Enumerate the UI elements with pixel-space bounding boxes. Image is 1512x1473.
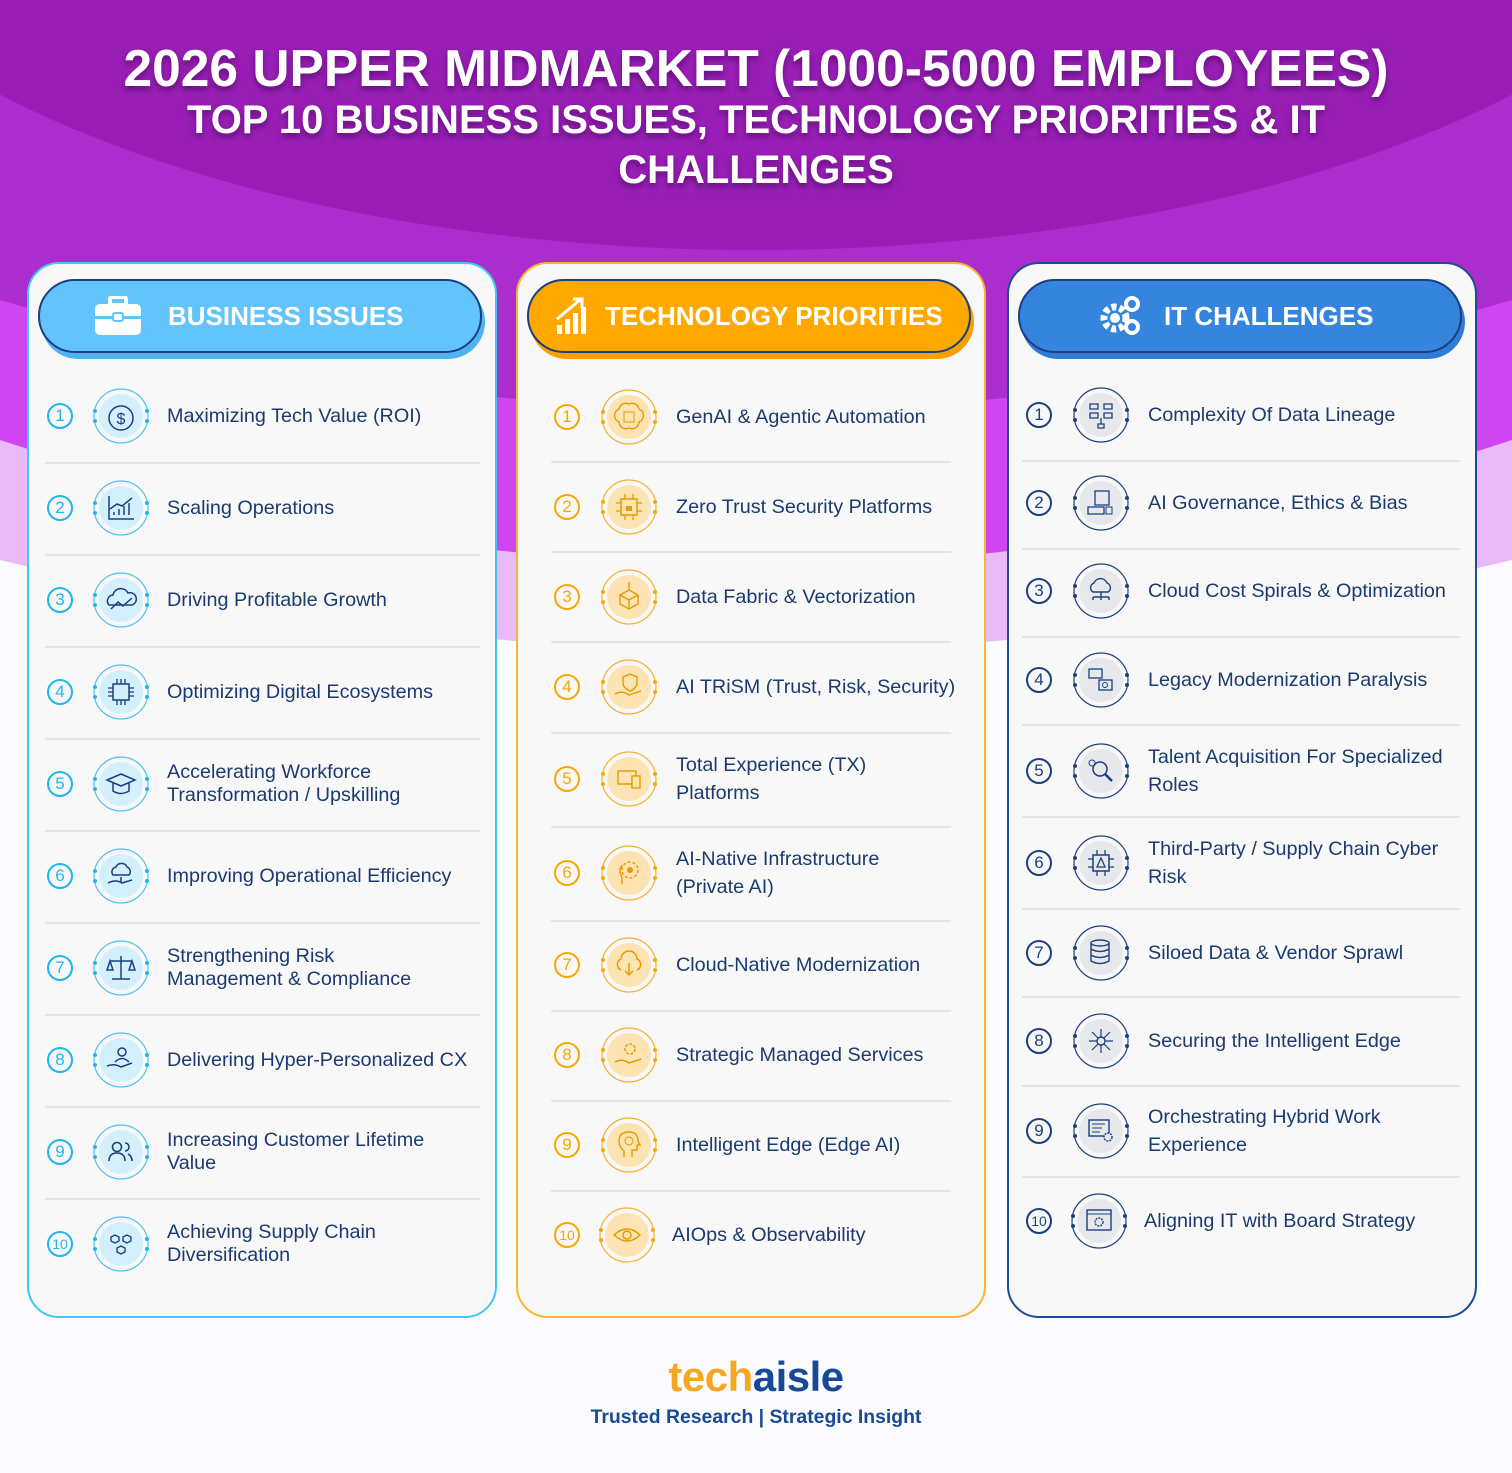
header: business issues: BUSINESS ISSUES [168, 300, 404, 330]
item 3 [554, 569, 916, 625]
item 3 [47, 572, 387, 628]
item 1 [1026, 387, 1395, 443]
item 5: Total Experience (TX) [676, 754, 866, 776]
subtitle [186, 98, 1326, 192]
panel: business issues [27, 262, 497, 1318]
item 3: 3 [562, 587, 572, 606]
item 8: Securing the Intelligent Edge [1148, 1030, 1401, 1052]
header: it challenges: IT CHALLENGES [1164, 300, 1373, 330]
item 3 [1026, 563, 1446, 619]
item 8 [1026, 1013, 1401, 1069]
item 4: 4 [55, 682, 65, 701]
item 7: 7 [1034, 943, 1044, 962]
item 9: Increasing Customer Lifetime [167, 1129, 424, 1151]
item 3: 3 [55, 590, 65, 609]
item 3: Cloud Cost Spirals & Optimization [1148, 580, 1446, 602]
item 4: Optimizing Digital Ecosystems [167, 680, 433, 702]
header: technology priorities: TECHNOLOGY PRIORITIES [605, 300, 943, 330]
item 7 [47, 940, 411, 996]
item 2: Zero Trust Security Platforms [676, 496, 932, 518]
item 7: 7 [55, 958, 65, 977]
item 7 [554, 937, 920, 993]
list: technology priorities [551, 389, 955, 1263]
item 5: 5 [1034, 761, 1044, 780]
item 6 [554, 845, 879, 901]
item 5 [47, 756, 400, 812]
item 2: 2 [1034, 493, 1044, 512]
item 6: Risk [1148, 866, 1186, 888]
list: business issues [45, 388, 480, 1272]
item 4: Legacy Modernization Paralysis [1148, 669, 1427, 691]
item 2 [1026, 475, 1407, 531]
item 9: 9 [1034, 1121, 1044, 1140]
header: it challenges [1018, 279, 1462, 353]
item 9: Intelligent Edge (Edge AI) [676, 1134, 900, 1156]
item 5: Accelerating Workforce [167, 761, 371, 783]
item 10: 10 [1031, 1213, 1047, 1229]
item 2: 2 [562, 497, 572, 516]
item 5: Platforms [676, 782, 760, 804]
item 2 [554, 479, 932, 535]
background shapes [0, 0, 1512, 642]
item 10: AIOps & Observability [672, 1224, 866, 1246]
item 4: 4 [1034, 670, 1044, 689]
item 9 [554, 1117, 900, 1173]
item 8: 8 [55, 1050, 65, 1069]
item 9: Value [167, 1152, 216, 1174]
item 7: Siloed Data & Vendor Sprawl [1148, 942, 1403, 964]
item 7: Management & Compliance [167, 968, 411, 990]
subtitle: CHALLENGES [618, 148, 894, 192]
item 1: GenAI & Agentic Automation [676, 406, 926, 428]
panel: it challenges [1007, 262, 1477, 1318]
item 3: Driving Profitable Growth [167, 588, 387, 610]
item 1: 1 [55, 406, 65, 425]
item 10 [554, 1207, 866, 1263]
item 7: 7 [562, 955, 572, 974]
item 2: AI Governance, Ethics & Bias [1148, 492, 1407, 514]
item 6: 6 [55, 866, 65, 885]
item 5: Transformation / Upskilling [167, 784, 400, 806]
item 3: 3 [1034, 581, 1044, 600]
item 1: 1 [562, 407, 572, 426]
item 7: Cloud-Native Modernization [676, 954, 920, 976]
item 10: Achieving Supply Chain [167, 1221, 376, 1243]
item 10: Diversification [167, 1244, 290, 1266]
item 1: Maximizing Tech Value (ROI) [167, 404, 421, 426]
item 6: 6 [1034, 853, 1044, 872]
item 4 [1026, 652, 1427, 708]
panel: technology priorities [516, 262, 986, 1318]
item 10: 10 [52, 1236, 68, 1252]
item 1: $ [117, 411, 126, 428]
item 6: (Private AI) [676, 876, 774, 898]
logo: techaisle [668, 1353, 844, 1400]
item 4: 4 [562, 677, 572, 696]
item 5 [554, 751, 866, 807]
item 2: Scaling Operations [167, 496, 334, 518]
item 9: 9 [562, 1135, 572, 1154]
item 9: Orchestrating Hybrid Work [1148, 1106, 1381, 1128]
item 7: Strengthening Risk [167, 945, 334, 967]
item 8 [554, 1027, 923, 1083]
item 1: Complexity Of Data Lineage [1148, 404, 1395, 426]
item 4: AI TRiSM (Trust, Risk, Security) [676, 676, 955, 698]
item 2 [47, 480, 334, 536]
item 1 [47, 388, 421, 444]
item 9: Experience [1148, 1134, 1247, 1156]
item 5: 5 [55, 774, 65, 793]
item 8: 8 [562, 1045, 572, 1064]
item 6: Improving Operational Efficiency [167, 864, 451, 886]
item 8: 8 [1034, 1031, 1044, 1050]
header: technology priorities [527, 279, 971, 353]
item 8: Strategic Managed Services [676, 1044, 923, 1066]
item 6 [47, 848, 452, 904]
item 7 [1026, 925, 1403, 981]
item 1: 1 [1034, 405, 1044, 424]
item 4 [554, 659, 955, 715]
tagline: Trusted Research | Strategic Insight [591, 1406, 921, 1428]
item 10: 10 [559, 1227, 575, 1243]
item 10 [1026, 1193, 1416, 1249]
item 1 [554, 389, 926, 445]
item 8 [47, 1032, 467, 1088]
item 3: Data Fabric & Vectorization [676, 586, 916, 608]
item 9 [1026, 1103, 1381, 1159]
item 4 [47, 664, 433, 720]
item 9: 9 [55, 1142, 65, 1161]
item 8: Delivering Hyper-Personalized CX [167, 1048, 467, 1070]
header: business issues [38, 279, 482, 353]
item 6: 6 [562, 863, 572, 882]
item 6: AI-Native Infrastructure [676, 848, 879, 870]
item 6: Third-Party / Supply Chain Cyber [1148, 838, 1438, 860]
item 10 [47, 1216, 376, 1272]
item 6 [1026, 835, 1438, 891]
item 5: Talent Acquisition For Specialized [1148, 746, 1443, 768]
item 9 [47, 1124, 424, 1180]
item 5 [1026, 743, 1443, 799]
subtitle: TOP 10 BUSINESS ISSUES, TECHNOLOGY PRIORITIES & IT [187, 98, 1325, 142]
item 10: Aligning IT with Board Strategy [1144, 1210, 1415, 1232]
item 5: 5 [562, 769, 572, 788]
item 2: 2 [55, 498, 65, 517]
item 5: Roles [1148, 774, 1199, 796]
title: 2026 UPPER MIDMARKET (1000-5000 EMPLOYEES) [123, 39, 1389, 97]
